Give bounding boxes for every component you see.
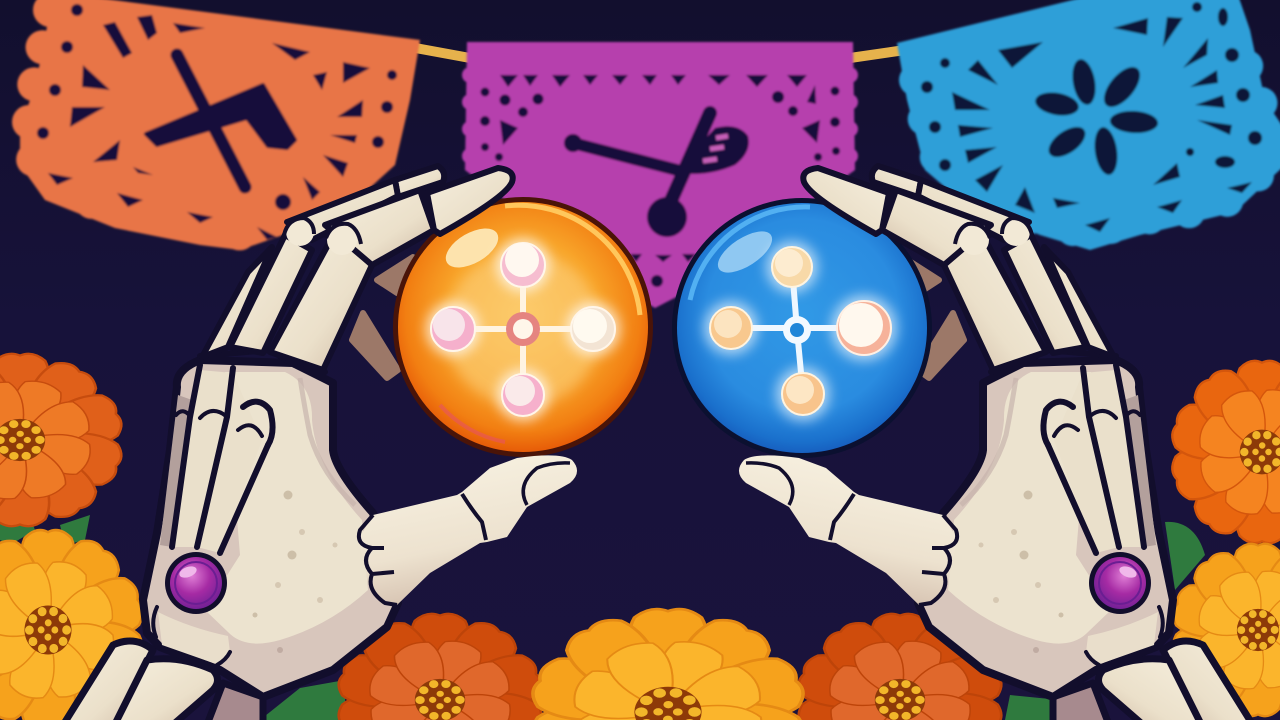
marigold: left orange [0,354,127,526]
banner: blue papel picado [897,0,1280,250]
orange orb [393,197,653,457]
blue orb [672,198,932,458]
string between banners [410,47,905,58]
marigold: right yellow [1168,544,1280,716]
marigold: left yellow [0,530,148,720]
marigold: right orange [1167,361,1280,543]
marigold: bottom centre [526,609,810,720]
network icon [704,241,897,421]
icon: flower [1033,57,1159,176]
icon: crossed tool [146,55,295,187]
marigold: bottom left [333,614,547,720]
banner: orange papel picado [20,0,420,250]
banner: purple papel picado [465,42,855,308]
back finger bones, right [903,257,964,378]
network icon [426,238,620,421]
back finger bones, left [352,257,413,378]
leaves [0,490,1205,720]
right skeleton hand [739,166,1256,720]
icon: crossed utensils [564,113,749,237]
marigold: bottom right [793,614,1007,720]
left skeleton hand [60,166,577,720]
